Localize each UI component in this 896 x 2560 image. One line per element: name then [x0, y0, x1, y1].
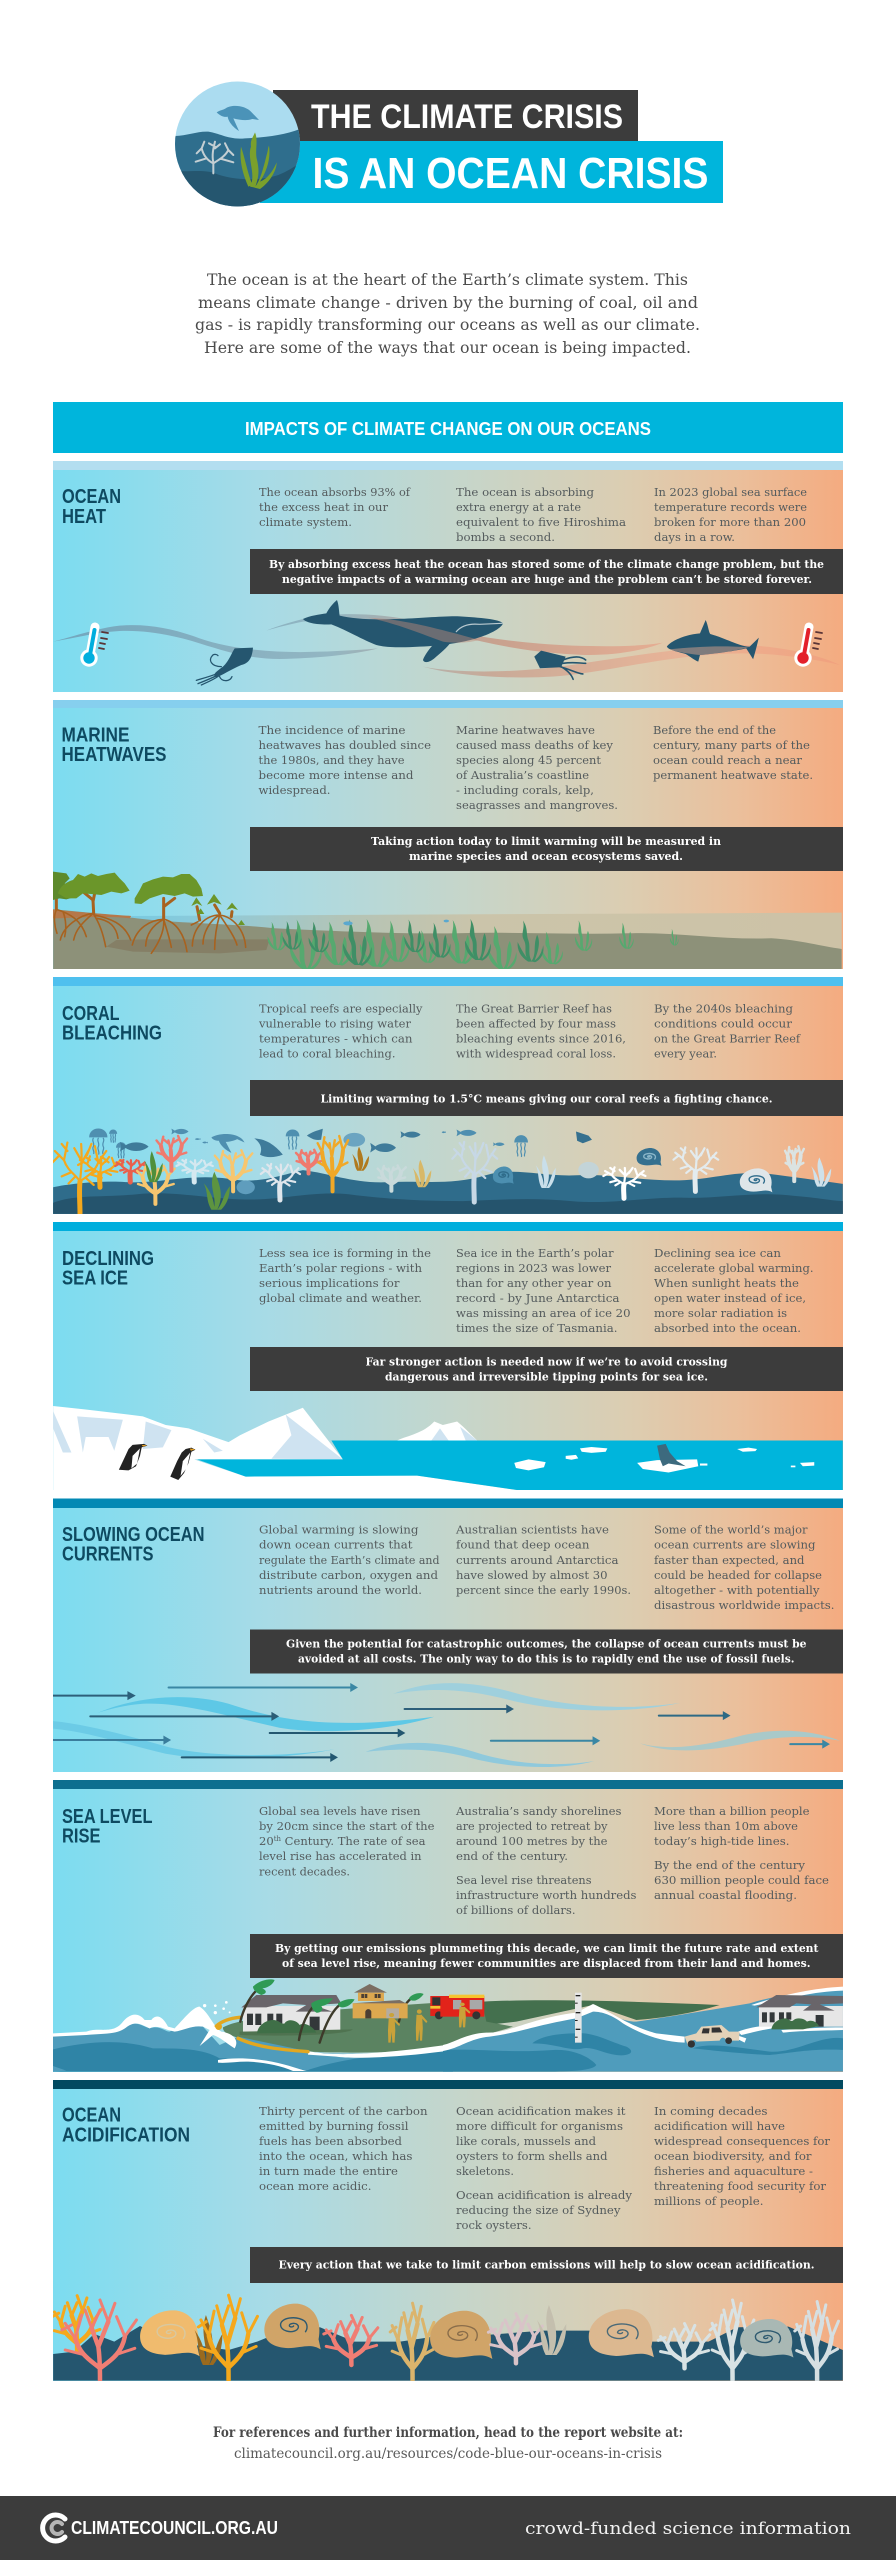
text column 3: every year.: [654, 1046, 717, 1060]
footer references: [213, 2425, 683, 2462]
text column 3: threatening food security for: [654, 2179, 826, 2193]
text column 2: was missing an area of ice 20: [456, 1306, 630, 1320]
heading: marine heatwaves: [62, 724, 166, 766]
text column 1: widespread.: [258, 783, 330, 797]
text column 3: more solar radiation is: [654, 1306, 787, 1320]
icon: orca: [667, 620, 759, 662]
text column 2: [456, 485, 626, 544]
illustration: sea ice and penguins: [53, 1406, 843, 1490]
firefighter: [459, 2003, 469, 2027]
text column 3: century, many parts of the: [653, 738, 810, 752]
text column 1: the 1980s, and they have: [258, 753, 405, 767]
text column 1: become more intense and: [258, 768, 414, 782]
text column 2: equivalent to five Hiroshima: [456, 515, 626, 529]
text column 3: [654, 1804, 829, 1902]
text column 3: fisheries and aquaculture -: [654, 2164, 813, 2178]
footer bar: [0, 2496, 896, 2560]
flood foam: [443, 1987, 843, 2051]
text column 2: infrastructure worth hundreds: [456, 1888, 637, 1902]
heading: ocean heat: [62, 486, 121, 528]
callout: Limiting warming to 1.5°C means giving our coral reefs a fighting chance.: [320, 1092, 772, 1106]
callout: [250, 1934, 843, 1978]
text column 3: [654, 1522, 834, 1612]
heading: coral bleaching: [62, 1003, 162, 1044]
intro paragraph: [195, 271, 700, 357]
icon: cold thermometer: [80, 627, 108, 667]
text column 1: lead to coral bleaching.: [259, 1046, 396, 1060]
callout: Every action that we take to limit carbon emissions will help to slow ocean acidification.: [278, 2258, 814, 2272]
text column 1: [259, 1246, 431, 1305]
icon: squid left: [196, 648, 253, 685]
callout: By getting our emissions plummeting this decade, we can limit the future rate and extent: [275, 1941, 819, 1955]
title logo badge: [172, 78, 723, 212]
fire truck: [440, 1995, 484, 2019]
text column 1: regulate the Earth’s climate and: [259, 1553, 440, 1567]
text column 3: Some of the world’s major: [654, 1522, 808, 1536]
text column 2: like corals, mussels and: [456, 2134, 597, 2148]
text column 1: distribute carbon, oxygen and: [259, 1568, 439, 1582]
text column 2: around 100 metres by the: [456, 1834, 608, 1848]
panel: slowing ocean currents: [53, 1498, 843, 1772]
text column 1: heatwaves has doubled since: [258, 738, 431, 752]
icon: climate council logo: [43, 2515, 65, 2541]
callout: [250, 827, 843, 871]
corals: [53, 1136, 831, 1213]
illustration: mangroves and seagrass: [53, 872, 842, 970]
heading: coral bleaching: CORAL: [62, 1003, 120, 1025]
palm trees: [240, 1979, 424, 2043]
heading: ocean acidification: [62, 2104, 190, 2146]
title bar blue: [260, 141, 723, 203]
text column 2: Australia’s sandy shorelines: [455, 1804, 622, 1818]
heading: coral bleaching: BLEACHING: [62, 1022, 162, 1044]
text column 1: Less sea ice is forming in the: [259, 1246, 431, 1260]
text column 3: temperature records were: [654, 500, 807, 514]
text column 1: ocean more acidic.: [259, 2179, 372, 2193]
firefighters: [388, 2009, 426, 2043]
callout: [250, 1347, 843, 1391]
text column 3: By the 2040s bleaching: [654, 1002, 794, 1016]
callout: negative impacts of a warming ocean are huge and the problem can’t be stored forever.: [282, 572, 812, 586]
text column 2: Sea level rise threatens: [456, 1873, 592, 1887]
text column 3: absorbed into the ocean.: [654, 1321, 801, 1335]
text column 3: conditions could occur: [654, 1016, 792, 1030]
illustration: coral reef: [53, 1129, 843, 1214]
footer logotype: CLIMATECOUNCIL.ORG.AU: [71, 2518, 278, 2538]
text column 1: vulnerable to rising water: [258, 1016, 411, 1030]
callout: Taking action today to limit warming will be measured in: [371, 834, 722, 848]
callout: dangerous and irreversible tipping points for sea ice.: [385, 1370, 708, 1384]
text column 2: [455, 1522, 631, 1597]
car: [685, 2025, 740, 2048]
footer references: For references and further information, head to the report website at:: [213, 2425, 683, 2441]
illustration: currents and arrows: [53, 1683, 840, 1767]
heading: sea level rise: RISE: [62, 1826, 100, 1848]
text column 2: [456, 1246, 630, 1335]
text column 2: The ocean is absorbing: [456, 485, 595, 499]
text column 3: When sunlight heats the: [654, 1276, 799, 1290]
mangrove trees: [53, 872, 246, 953]
text column 1: global climate and weather.: [259, 1291, 422, 1305]
text column 3: millions of people.: [654, 2194, 764, 2208]
text column 1: Earth’s polar regions - with: [259, 1261, 423, 1275]
text column 2: caused mass deaths of key: [456, 738, 613, 752]
callout: [250, 1630, 843, 1674]
text column 1: [258, 1002, 423, 1060]
text column 2: bombs a second.: [456, 530, 555, 544]
text column 3: [654, 1002, 801, 1060]
text column 3: today’s high-tide lines.: [654, 1834, 790, 1848]
text column 2: of billions of dollars.: [456, 1903, 576, 1917]
callout: Given the potential for catastrophic outcomes, the collapse of ocean currents must be: [286, 1636, 806, 1650]
text column 1: temperatures - which can: [259, 1032, 413, 1046]
text column 2: skeletons.: [456, 2164, 514, 2178]
text column 2: species along 45 percent: [456, 753, 601, 767]
callout: [250, 549, 843, 594]
text column 1: The ocean absorbs 93% of: [259, 485, 411, 499]
icon: whale: [303, 600, 503, 662]
callout: avoided at all costs. The only way to do this is to rapidly end the use of fossil fuels.: [298, 1652, 794, 1666]
text column 3: annual coastal flooding.: [654, 1888, 797, 1902]
icon: hot thermometer: [794, 627, 822, 667]
text column 2: [456, 2104, 632, 2232]
text column 2: have slowed by almost 30: [456, 1568, 608, 1582]
text column 1: the excess heat in our: [259, 500, 388, 514]
text column 2: been affected by four mass: [456, 1016, 616, 1030]
text column 3: altogether - with potentially: [654, 1583, 820, 1597]
text column 2: oysters to form shells and: [456, 2149, 608, 2163]
text column 1: recent decades.: [259, 1864, 350, 1878]
heading: declining sea ice: SEA ICE: [62, 1268, 128, 1290]
intro paragraph: gas - is rapidly transforming our oceans as well as our climate.: [195, 316, 700, 334]
text column 1: The incidence of marine: [258, 723, 406, 737]
panel: ocean heat: [53, 461, 843, 692]
text column 3: By the end of the century: [654, 1858, 805, 1872]
text column 1: [259, 2104, 428, 2193]
intro paragraph: Here are some of the ways that our ocean is being impacted.: [204, 339, 691, 357]
text column 2: record - by June Antarctica: [456, 1291, 620, 1305]
text column 2: Australian scientists have: [455, 1522, 609, 1536]
logo circle with turtle, coral and kelp: [175, 82, 300, 206]
text column 1: Global warming is slowing: [259, 1522, 419, 1536]
text column 2: times the size of Tasmania.: [456, 1321, 618, 1335]
text column 2: than for any other year on: [456, 1276, 612, 1290]
footer references: climatecouncil.org.au/resources/code-blue-our-oceans-in-crisis: [234, 2446, 662, 2462]
text column 3: days in a row.: [654, 530, 735, 544]
text column 1: nutrients around the world.: [259, 1583, 422, 1597]
text column 2: rock oysters.: [456, 2218, 532, 2232]
text column 3: ocean could reach a near: [653, 753, 802, 767]
intro paragraph: means climate change - driven by the burning of coal, oil and: [198, 294, 698, 312]
text column 3: ocean biodiversity, and for: [654, 2149, 812, 2163]
panel: coral bleaching: [53, 977, 843, 1214]
house: [241, 1995, 341, 2032]
text column 2: are projected to retreat by: [456, 1819, 608, 1833]
callout: By absorbing excess heat the ocean has stored some of the climate change problem, but the: [269, 557, 824, 571]
text column 3: could be headed for collapse: [654, 1568, 822, 1582]
text column 3: broken for more than 200: [654, 515, 806, 529]
text column 2: Ocean acidification is already: [456, 2188, 632, 2202]
text column 3: open water instead of ice,: [654, 1291, 806, 1305]
arrows: [53, 1684, 829, 1761]
text column 3: [653, 723, 813, 782]
heading: marine heatwaves: HEATWAVES: [62, 744, 166, 766]
heading: declining sea ice: DECLINING: [62, 1248, 154, 1270]
text column 1: Thirty percent of the carbon: [259, 2104, 428, 2118]
text column 3: ocean currents are slowing: [654, 1538, 816, 1552]
fire truck: [430, 1996, 460, 2019]
corals: [52, 2295, 838, 2380]
heading: slowing ocean currents: SLOWING OCEAN: [62, 1524, 204, 1546]
text column 3: faster than expected, and: [654, 1553, 805, 1567]
sea creatures: [89, 1129, 592, 1158]
text column 3: In 2023 global sea surface: [654, 485, 807, 499]
icon: seal: [657, 1444, 686, 1466]
text column 2: Marine heatwaves have: [456, 723, 595, 737]
panel: ocean acidification: [52, 2080, 843, 2381]
text column 3: 630 million people could face: [654, 1873, 829, 1887]
callout: of sea level rise, meaning fewer communities are displaced from their land and homes.: [282, 1956, 810, 1970]
title bar dark: [273, 90, 638, 141]
text column 1: climate system.: [259, 515, 352, 529]
callout: Far stronger action is needed now if we’re to avoid crossing: [366, 1354, 728, 1368]
text column 2: The Great Barrier Reef has: [456, 1002, 612, 1016]
text column 1: [259, 1522, 440, 1597]
footer tagline: crowd-funded science information: [525, 2519, 851, 2539]
panel: sea level rise: [53, 1780, 843, 2072]
heading: sea level rise: SEA LEVEL: [62, 1806, 152, 1828]
section header band: [53, 402, 843, 453]
text column 2: more difficult for organisms: [456, 2119, 623, 2133]
icon: penguins: [119, 1444, 195, 1480]
text column 2: seagrasses and mangroves.: [456, 798, 618, 812]
text column 1: fuels has been absorbed: [259, 2134, 403, 2148]
heading: sea level rise: [62, 1806, 152, 1848]
panel: marine heatwaves: [53, 700, 843, 970]
title bar blue: IS AN OCEAN CRISIS: [312, 150, 708, 198]
seagrass meadow: [268, 919, 679, 970]
heading: ocean acidification: ACIDIFICATION: [62, 2124, 190, 2146]
text column 3: on the Great Barrier Reef: [654, 1032, 801, 1046]
text column 1: serious implications for: [259, 1276, 400, 1290]
right house: [756, 1995, 843, 2029]
tan house: [351, 1984, 408, 2018]
wave foam: [53, 2007, 236, 2048]
heading: ocean heat: OCEAN: [62, 486, 121, 508]
panel: declining sea ice: [53, 1222, 843, 1490]
text column 2: end of the century.: [456, 1849, 568, 1863]
text column 2: [456, 1002, 626, 1060]
text column 2: currents around Antarctica: [456, 1553, 619, 1567]
text column 3: widespread consequences for: [654, 2134, 830, 2148]
text column 1: level rise has accelerated in: [259, 1849, 422, 1863]
text column 2: - including corals, kelp,: [456, 783, 594, 797]
icon: squid right: [534, 651, 586, 679]
text column 1: down ocean currents that: [259, 1538, 413, 1552]
heading: marine heatwaves: MARINE: [62, 724, 130, 746]
text column 1: by 20cm since the start of the: [259, 1819, 435, 1833]
heading: slowing ocean currents: [62, 1524, 204, 1566]
heading: ocean heat: HEAT: [62, 506, 106, 528]
text column 3: [654, 2104, 830, 2208]
text column 3: acidification will have: [654, 2119, 785, 2133]
intro paragraph: The ocean is at the heart of the Earth’s climate system. This: [207, 271, 688, 289]
text column 2: of Australia’s coastline: [456, 768, 589, 782]
text column 3: [654, 1246, 814, 1335]
text column 3: disastrous worldwide impacts.: [654, 1598, 834, 1612]
callout: [250, 2247, 843, 2283]
ice floes: [514, 1447, 814, 1472]
text column 1: Global sea levels have risen: [259, 1804, 421, 1818]
text column 1: [258, 723, 431, 797]
text column 2: bleaching events since 2016,: [456, 1032, 626, 1046]
heading: slowing ocean currents: CURRENTS: [62, 1544, 154, 1566]
callout: marine species and ocean ecosystems saved.: [409, 849, 683, 863]
text column 1: Century. The rate of sea: [281, 1834, 426, 1848]
text column 2: percent since the early 1990s.: [456, 1583, 631, 1597]
text column 3: live less than 10m above: [654, 1819, 798, 1833]
illustration: marine life and warming currents: [53, 600, 840, 685]
text column 3: Declining sea ice can: [654, 1246, 782, 1260]
text column 2: regions in 2023 was lower: [456, 1261, 611, 1275]
text column 2: [456, 723, 618, 812]
callout: [250, 1080, 843, 1116]
text column 2: Ocean acidification makes it: [456, 2104, 626, 2118]
illustration: corals and shells on the seabed: [52, 2295, 843, 2381]
title bar dark: THE CLIMATE CRISIS: [311, 98, 623, 136]
text column 2: with widespread coral loss.: [456, 1046, 616, 1060]
text column 2: [455, 1804, 637, 1917]
sandbag barrier: [216, 2017, 308, 2052]
text column 1: in turn made the entire: [259, 2164, 398, 2178]
section header band: IMPACTS OF CLIMATE CHANGE ON OUR OCEANS: [245, 419, 651, 439]
text column 2: found that deep ocean: [456, 1538, 590, 1552]
text column 1: Tropical reefs are especially: [259, 1002, 423, 1016]
text column 3: permanent heatwave state.: [653, 768, 813, 782]
text column 3: [654, 485, 807, 544]
text column 1: [259, 485, 411, 529]
text column 3: More than a billion people: [654, 1804, 810, 1818]
illustration: flooded coastal town: [53, 1979, 843, 2072]
text column 1: th: [274, 1835, 281, 1843]
text column 1: 20: [259, 1834, 274, 1848]
heading: ocean acidification: OCEAN: [62, 2104, 121, 2126]
text column 3: In coming decades: [654, 2104, 768, 2118]
text column 1: into the ocean, which has: [259, 2149, 413, 2163]
text column 3: accelerate global warming.: [654, 1261, 814, 1275]
bushes: [257, 2020, 316, 2033]
text column 2: extra energy at a rate: [456, 500, 581, 514]
heading: declining sea ice: [62, 1248, 154, 1290]
text column 1: [259, 1804, 435, 1878]
text column 2: Sea ice in the Earth’s polar: [456, 1246, 614, 1260]
text column 1: emitted by burning fossil: [259, 2119, 409, 2133]
text column 2: reducing the size of Sydney: [456, 2203, 621, 2217]
text column 3: Before the end of the: [653, 723, 776, 737]
flood gauge: [575, 1993, 582, 2043]
